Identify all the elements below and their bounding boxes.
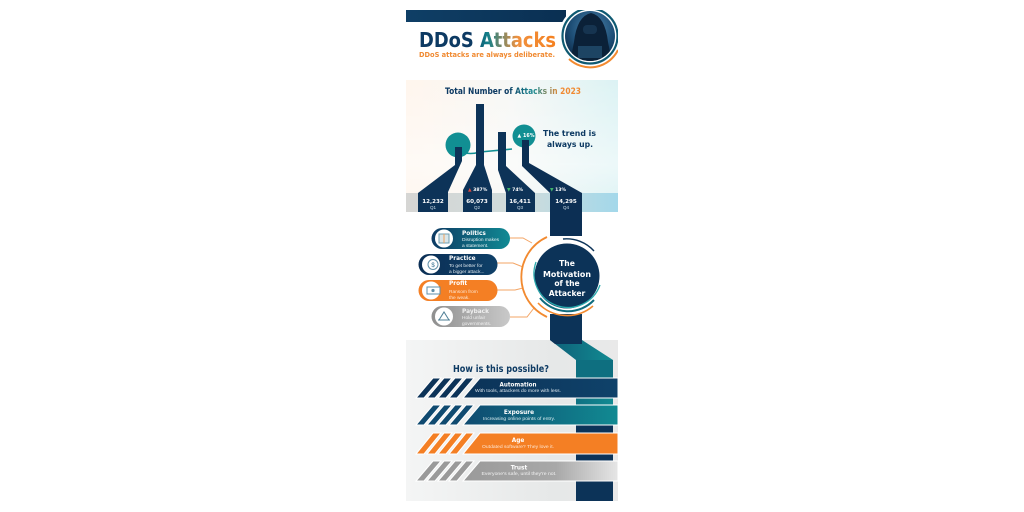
quarters: Q2 bbox=[474, 205, 480, 210]
band: exposure: Exposure bbox=[504, 410, 534, 416]
trend connector bbox=[462, 149, 512, 154]
chart title: Total Number of Attacks in 2023 bbox=[445, 87, 581, 97]
band: exposure: Increasing online points of entry. bbox=[483, 416, 555, 421]
values bbox=[422, 199, 577, 205]
values: 16,411 bbox=[509, 199, 531, 205]
pill: profit bbox=[418, 280, 498, 301]
header photo: hooded hacker bbox=[561, 10, 618, 68]
band: exposure bbox=[416, 405, 618, 425]
motivation connectors bbox=[497, 238, 534, 317]
pill: practice: a bigger attack... bbox=[449, 269, 484, 275]
title: DDoS Attacks bbox=[419, 28, 556, 52]
change labels: ▼ 13% bbox=[550, 187, 567, 193]
motivation circle: The bbox=[559, 259, 575, 268]
pill: profit: Ransom from bbox=[449, 289, 478, 295]
header bar bbox=[406, 10, 566, 22]
pill: practice bbox=[418, 254, 498, 275]
bar Q2 bbox=[463, 104, 492, 212]
pill: payback: governments. bbox=[462, 321, 491, 327]
motivation circle: of the bbox=[554, 279, 580, 288]
quarters: Q3 bbox=[517, 205, 523, 210]
bar Q1 bbox=[418, 147, 462, 212]
change labels: ▲ 387% bbox=[468, 187, 488, 193]
motivation circle: Attacker bbox=[549, 289, 586, 298]
change labels bbox=[468, 187, 567, 193]
band: automation: With tools, attackers do more with less. bbox=[475, 388, 561, 393]
values: 60,073 bbox=[466, 199, 488, 205]
band: trust bbox=[416, 461, 618, 481]
band: trust: Everyone's safe, until they're not. bbox=[482, 471, 556, 476]
ribbon below motivation bbox=[550, 314, 582, 340]
subtitle: DDoS attacks are always deliberate. bbox=[419, 50, 555, 59]
pill: politics: Politics bbox=[462, 231, 486, 237]
quarters: Q4 bbox=[563, 205, 569, 210]
band: age: Age bbox=[512, 438, 524, 444]
pill: politics bbox=[432, 228, 510, 249]
change labels: ▼ 74% bbox=[507, 187, 524, 193]
pill: profit: the weak. bbox=[449, 295, 470, 301]
pill: payback bbox=[432, 306, 510, 327]
pill: payback: Payback bbox=[462, 309, 489, 315]
pill: practice: Practice bbox=[449, 256, 476, 262]
pill: politics: a statement. bbox=[462, 243, 488, 249]
quarters: Q1 bbox=[430, 205, 436, 210]
panel: total number of attacks: always up. bbox=[547, 139, 593, 149]
panel: total number of attacks bbox=[406, 80, 618, 236]
pill: profit: Profit bbox=[449, 281, 467, 287]
pill: politics: Disruption makes bbox=[462, 237, 500, 243]
ribbon bbox=[550, 340, 613, 460]
heading: How is this possible? bbox=[453, 364, 549, 375]
values: 12,232 bbox=[422, 199, 444, 205]
band: automation: Automation bbox=[500, 382, 536, 388]
panel: how is this possible bbox=[406, 340, 618, 501]
pill: payback: Hold unfair bbox=[462, 315, 486, 321]
trend circle 2 bbox=[512, 124, 536, 148]
band: age bbox=[416, 433, 618, 454]
baseline band bbox=[406, 193, 618, 212]
motivation circle: Motivation bbox=[543, 270, 591, 279]
motivation circle bbox=[521, 237, 600, 317]
label 16%: ▲ 16% bbox=[518, 133, 535, 139]
band: trust: Trust bbox=[511, 466, 527, 472]
band: automation bbox=[416, 378, 618, 398]
values: 14,295 bbox=[555, 199, 577, 205]
bar Q3 bbox=[498, 132, 535, 212]
bar Q4 and ribbon bbox=[522, 140, 582, 236]
trend text: The trend is bbox=[543, 128, 596, 138]
trend circle 1 bbox=[446, 132, 470, 158]
quarters bbox=[430, 205, 569, 210]
pill: practice: To get better for bbox=[449, 263, 483, 269]
band: age: Outdated software? They love it. bbox=[482, 444, 554, 449]
pill: practice: $ bbox=[431, 263, 435, 269]
